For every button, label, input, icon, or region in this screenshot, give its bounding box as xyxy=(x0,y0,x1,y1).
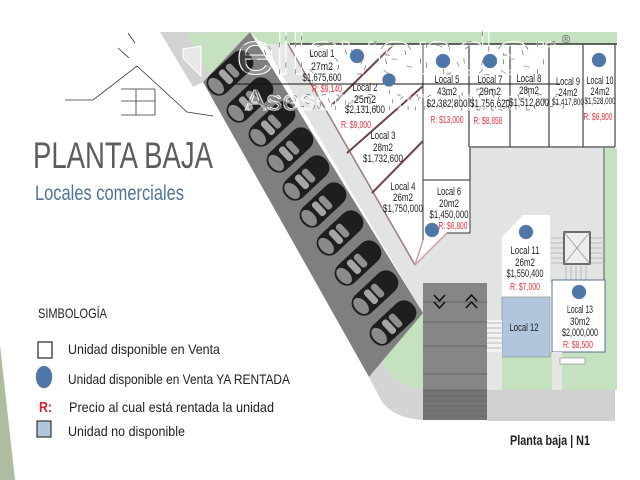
local 13 room xyxy=(552,280,605,352)
local 3 label: $1,732,600 xyxy=(363,153,403,165)
local 4 label xyxy=(383,181,423,215)
legend text: unavailable: Unidad no disponible xyxy=(68,423,185,439)
legend icon: rented circle xyxy=(36,366,52,388)
lower green area xyxy=(487,352,617,390)
local 7 label xyxy=(470,74,510,127)
parking strip xyxy=(203,32,423,377)
local 6 label: 20m2 xyxy=(439,198,459,210)
cars xyxy=(202,46,421,350)
legend icon: red R: R: xyxy=(39,399,52,416)
watermark tagline: Asesores Inmobiliarios xyxy=(245,85,565,117)
icon: up chevrons xyxy=(466,295,477,308)
local 8 label xyxy=(509,73,549,109)
watermark rule xyxy=(233,83,560,85)
watermark name: ellsvender xyxy=(236,20,556,87)
local 6 label: Local 6 xyxy=(437,186,461,198)
local 11 label: $1,550,400 xyxy=(506,268,544,280)
local 7 label: $1,756,620 xyxy=(470,98,510,110)
local 12 label: Local 12 xyxy=(510,322,538,334)
ramp xyxy=(423,283,487,420)
legend heading: SIMBOLOGÍA xyxy=(38,305,108,321)
local 11 room xyxy=(502,215,550,297)
local 10 label: 24m2 xyxy=(590,86,610,98)
local 5 label: Local 5 xyxy=(434,74,460,86)
local 7 label: Local 7 xyxy=(478,74,502,86)
subtitle: Locales comerciales xyxy=(35,182,184,205)
local 2 label: 25m2 xyxy=(354,94,376,106)
local 7 label: 29m2 xyxy=(479,86,501,98)
local 5 label: R: $13,000 xyxy=(430,114,464,126)
local 10 label xyxy=(584,75,616,123)
top left sidewalk xyxy=(160,32,250,87)
local 6 label: R: $6,800 xyxy=(438,220,468,232)
local 9 label: Local 9 xyxy=(556,76,580,88)
local 8 label: $1,512,800 xyxy=(509,97,549,109)
legend icon: unavailable square xyxy=(37,421,51,437)
local 1 label xyxy=(302,48,342,95)
local 13 label: $2,000,000 xyxy=(562,327,598,339)
local 13 label: 30m2 xyxy=(570,316,590,328)
title: PLANTA BAJA xyxy=(33,135,213,176)
local 9 label xyxy=(552,76,584,107)
bottom road xyxy=(487,390,615,421)
local 2 label: Local 2 xyxy=(352,82,378,94)
local 13 label xyxy=(562,304,598,351)
legend xyxy=(36,305,291,439)
legend text: rent price: Precio al cual está rentada la unidad xyxy=(69,399,274,415)
local 10 label: $1,528,000 xyxy=(584,96,616,106)
icon: down chevrons xyxy=(434,295,445,308)
local 2 label: $2,131,600 xyxy=(345,104,385,116)
local 5 label: 43m2 xyxy=(437,86,457,98)
local 2 label xyxy=(341,82,385,131)
local 4 label: $1,750,000 xyxy=(383,203,423,215)
lower stairs and walkways xyxy=(487,320,585,390)
local 1 label: 27m2 xyxy=(311,61,333,73)
legend text: rented: Unidad disponible en Venta YA RENTADA xyxy=(68,371,291,387)
local 8 label: 28m2 xyxy=(519,85,539,97)
local 6 label: $1,450,000 xyxy=(430,209,468,221)
green landscape strip lower left xyxy=(0,345,15,480)
local 11 label xyxy=(506,245,544,293)
local 11 label: 26m2 xyxy=(515,257,535,269)
local 8 label: Local 8 xyxy=(516,73,542,85)
local 4 label: 26m2 xyxy=(393,192,413,204)
local 1 label: $1,675,600 xyxy=(302,72,342,84)
local 12 room xyxy=(502,297,550,357)
white wall detail at top of strip xyxy=(183,46,201,76)
right green strip xyxy=(605,148,617,390)
watermark tagline dark fragments: Asesores Inmobiliarios xyxy=(245,85,565,117)
local 11 label: R: $7,000 xyxy=(510,281,540,293)
local 4 label: Local 4 xyxy=(390,181,416,193)
legend icon: available square xyxy=(38,342,52,358)
local 3 label: 28m2 xyxy=(373,142,393,154)
local 11 label: Local 11 xyxy=(510,245,540,257)
local 3 label xyxy=(363,130,403,165)
left green area xyxy=(382,312,423,389)
local 2 label: R: $9,000 xyxy=(341,119,371,131)
watermark house outline xyxy=(65,33,213,116)
local 9 label: $1,417,800 xyxy=(552,97,584,107)
local 5 label: $2,382,800 xyxy=(426,98,468,110)
local 5 label xyxy=(426,74,468,126)
local 7 label: R: $8,858 xyxy=(474,115,503,127)
stairs and elevator core xyxy=(551,232,604,280)
local 10 label: Local 10 xyxy=(586,75,614,87)
local 9 label: 24m2 xyxy=(558,87,578,99)
local 1 label: R: $9,140 xyxy=(312,83,342,95)
curved sidewalk xyxy=(369,362,423,420)
registered mark: ® xyxy=(562,34,570,46)
top green strip xyxy=(250,32,617,44)
local 3 label: Local 3 xyxy=(370,130,396,142)
legend text: available: Unidad disponible en Venta xyxy=(68,341,220,357)
local 1 label: Local 1 xyxy=(310,48,334,60)
local 13 label: R: $8,500 xyxy=(563,339,593,351)
floor caption: Planta baja | N1 xyxy=(510,433,590,448)
green wedge at top of strip xyxy=(185,32,250,75)
local 6 label xyxy=(430,186,468,232)
watermark logo xyxy=(65,20,570,117)
local 10 label: R: $6,800 xyxy=(584,111,613,123)
watermark name dark fragments: ellsvender xyxy=(236,20,556,87)
local 13 label: Local 13 xyxy=(567,304,593,316)
site plan xyxy=(160,32,617,421)
building walls xyxy=(288,44,617,352)
rented unit markers xyxy=(350,49,606,299)
plaza and walkway xyxy=(264,44,605,390)
